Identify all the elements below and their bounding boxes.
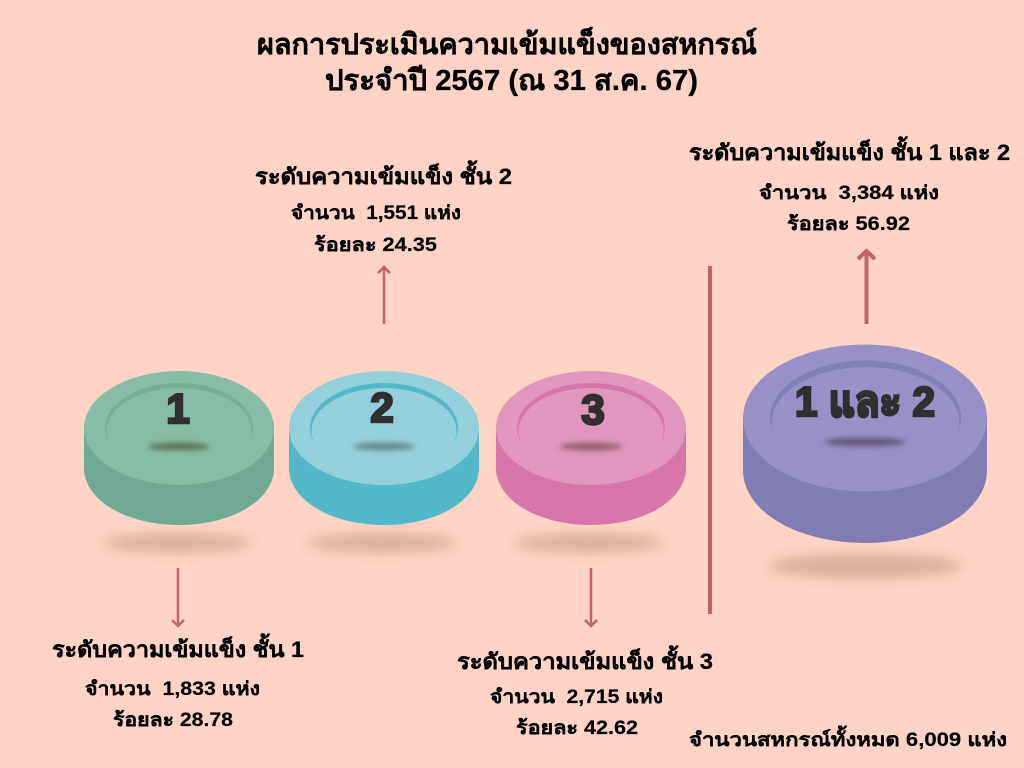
text block: level 3: ร้อยละ 42.62 (516, 717, 638, 739)
disc 3: 3 (581, 386, 605, 433)
text block: level 2: ระดับความเข้มแข็ง ชั้น 2 (255, 160, 512, 189)
title (257, 26, 757, 97)
text block: level 3 (457, 645, 713, 739)
title: ผลการประเมินความเข้มแข็งของสหกรณ์ (257, 26, 757, 61)
text block: level 2 (255, 160, 512, 256)
text block: levels 1 and 2: ร้อยละ 56.92 (787, 213, 910, 235)
text block: level 3: จำนวน 2,715 แห่ง (490, 687, 663, 708)
text block: level 1: จำนวน 1,833 แห่ง (85, 679, 260, 700)
text block: total cooperatives: จำนวนสหกรณ์ทั้งหมด 6,009 แห่ง (689, 725, 1007, 751)
text block: level 1 (52, 633, 304, 731)
text block: level 2: ร้อยละ 24.35 (314, 234, 437, 256)
arrow: up to levels 1 and 2 (858, 251, 875, 324)
disc 1 (84, 371, 274, 552)
text block: level 2: จำนวน 1,551 แห่ง (291, 203, 461, 224)
arrow: up to level 2 (378, 267, 390, 324)
disc 3 (496, 371, 686, 552)
disc 1: 1 (166, 385, 190, 432)
text block: levels 1 and 2: ระดับความเข้มแข็ง ชั้น 1 และ 2 (689, 136, 1010, 165)
disc 2: 2 (370, 384, 394, 431)
disc 2 (289, 371, 479, 552)
text block: levels 1 and 2: จำนวน 3,384 แห่ง (759, 183, 939, 204)
text block: levels 1 and 2 (689, 136, 1010, 235)
text block: level 1: ร้อยละ 28.78 (113, 709, 233, 731)
text block: level 1: ระดับความเข้มแข็ง ชั้น 1 (52, 633, 304, 662)
text block: level 3: ระดับความเข้มแข็ง ชั้น 3 (457, 645, 713, 674)
disc 4: levels 1 and 2 (743, 344, 987, 578)
arrow: down to level 1 (172, 568, 184, 626)
title: ประจำปี 2567 (ณ 31 ส.ค. 67) (325, 65, 698, 97)
vertical divider (708, 266, 712, 614)
disc 4: levels 1 and 2: 1 และ 2 (795, 378, 935, 425)
arrow: down to level 3 (585, 568, 597, 626)
